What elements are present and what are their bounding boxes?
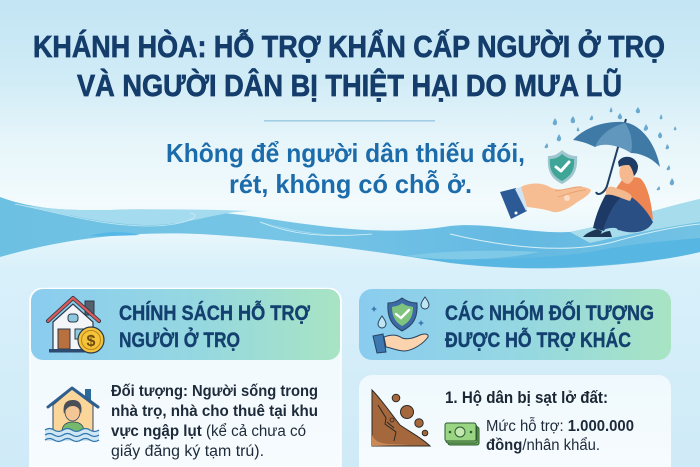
- icon: house with coin: [48, 298, 104, 353]
- subtitle: [166, 138, 525, 199]
- wave band: [0, 197, 700, 268]
- left heading: [119, 301, 310, 352]
- right heading: CÁC NHÓM ĐỐI TƯỢNG: [445, 301, 654, 325]
- subtitle: Không để người dân thiếu đói,: [166, 138, 525, 168]
- support amount text: đồng/nhân khẩu.: [486, 437, 600, 454]
- icon: shield on hand: [371, 297, 429, 353]
- title: [33, 28, 665, 103]
- left body text: vực ngập lụt (kể cả chưa có: [111, 423, 306, 440]
- support amount text: Mức hỗ trợ: 1.000.000: [486, 418, 634, 435]
- right heading: [445, 301, 654, 352]
- panel: right header: [359, 289, 671, 360]
- left body text: giấy đăng ký tạm trú).: [111, 443, 264, 460]
- divider: [264, 120, 435, 122]
- left body text: nhà trọ, nhà cho thuê tại khu: [111, 403, 318, 420]
- left body text: [111, 383, 318, 460]
- left header band: [31, 289, 340, 360]
- subtitle: rét, không có chỗ ở.: [229, 169, 472, 199]
- icon: person in flooded house: [45, 388, 99, 442]
- illustration: person under umbrella: [573, 119, 660, 237]
- illustration: rain drops: [545, 107, 676, 190]
- icon: house with coin: $: [87, 333, 96, 350]
- panel: left: [30, 288, 341, 467]
- title: VÀ NGƯỜI DÂN BỊ THIỆT HẠI DO MƯA LŨ: [77, 67, 622, 103]
- icon: banknotes: [445, 423, 479, 445]
- left heading: CHÍNH SÁCH HỖ TRỢ: [119, 301, 310, 325]
- illustration: helping hand: [500, 184, 591, 219]
- illustration: protective shield: [548, 150, 577, 184]
- left body text: Đối tượng: Người sống trong: [111, 383, 318, 400]
- group 1 heading: 1. Hộ dân bị sạt lở đất:: [445, 388, 608, 407]
- icon: landslide: [372, 390, 430, 446]
- left heading: NGƯỜI Ở TRỌ: [119, 328, 240, 352]
- panel: right card: [359, 375, 671, 467]
- right heading: ĐƯỢC HỖ TRỢ KHÁC: [445, 328, 631, 352]
- support amount text: [486, 418, 634, 454]
